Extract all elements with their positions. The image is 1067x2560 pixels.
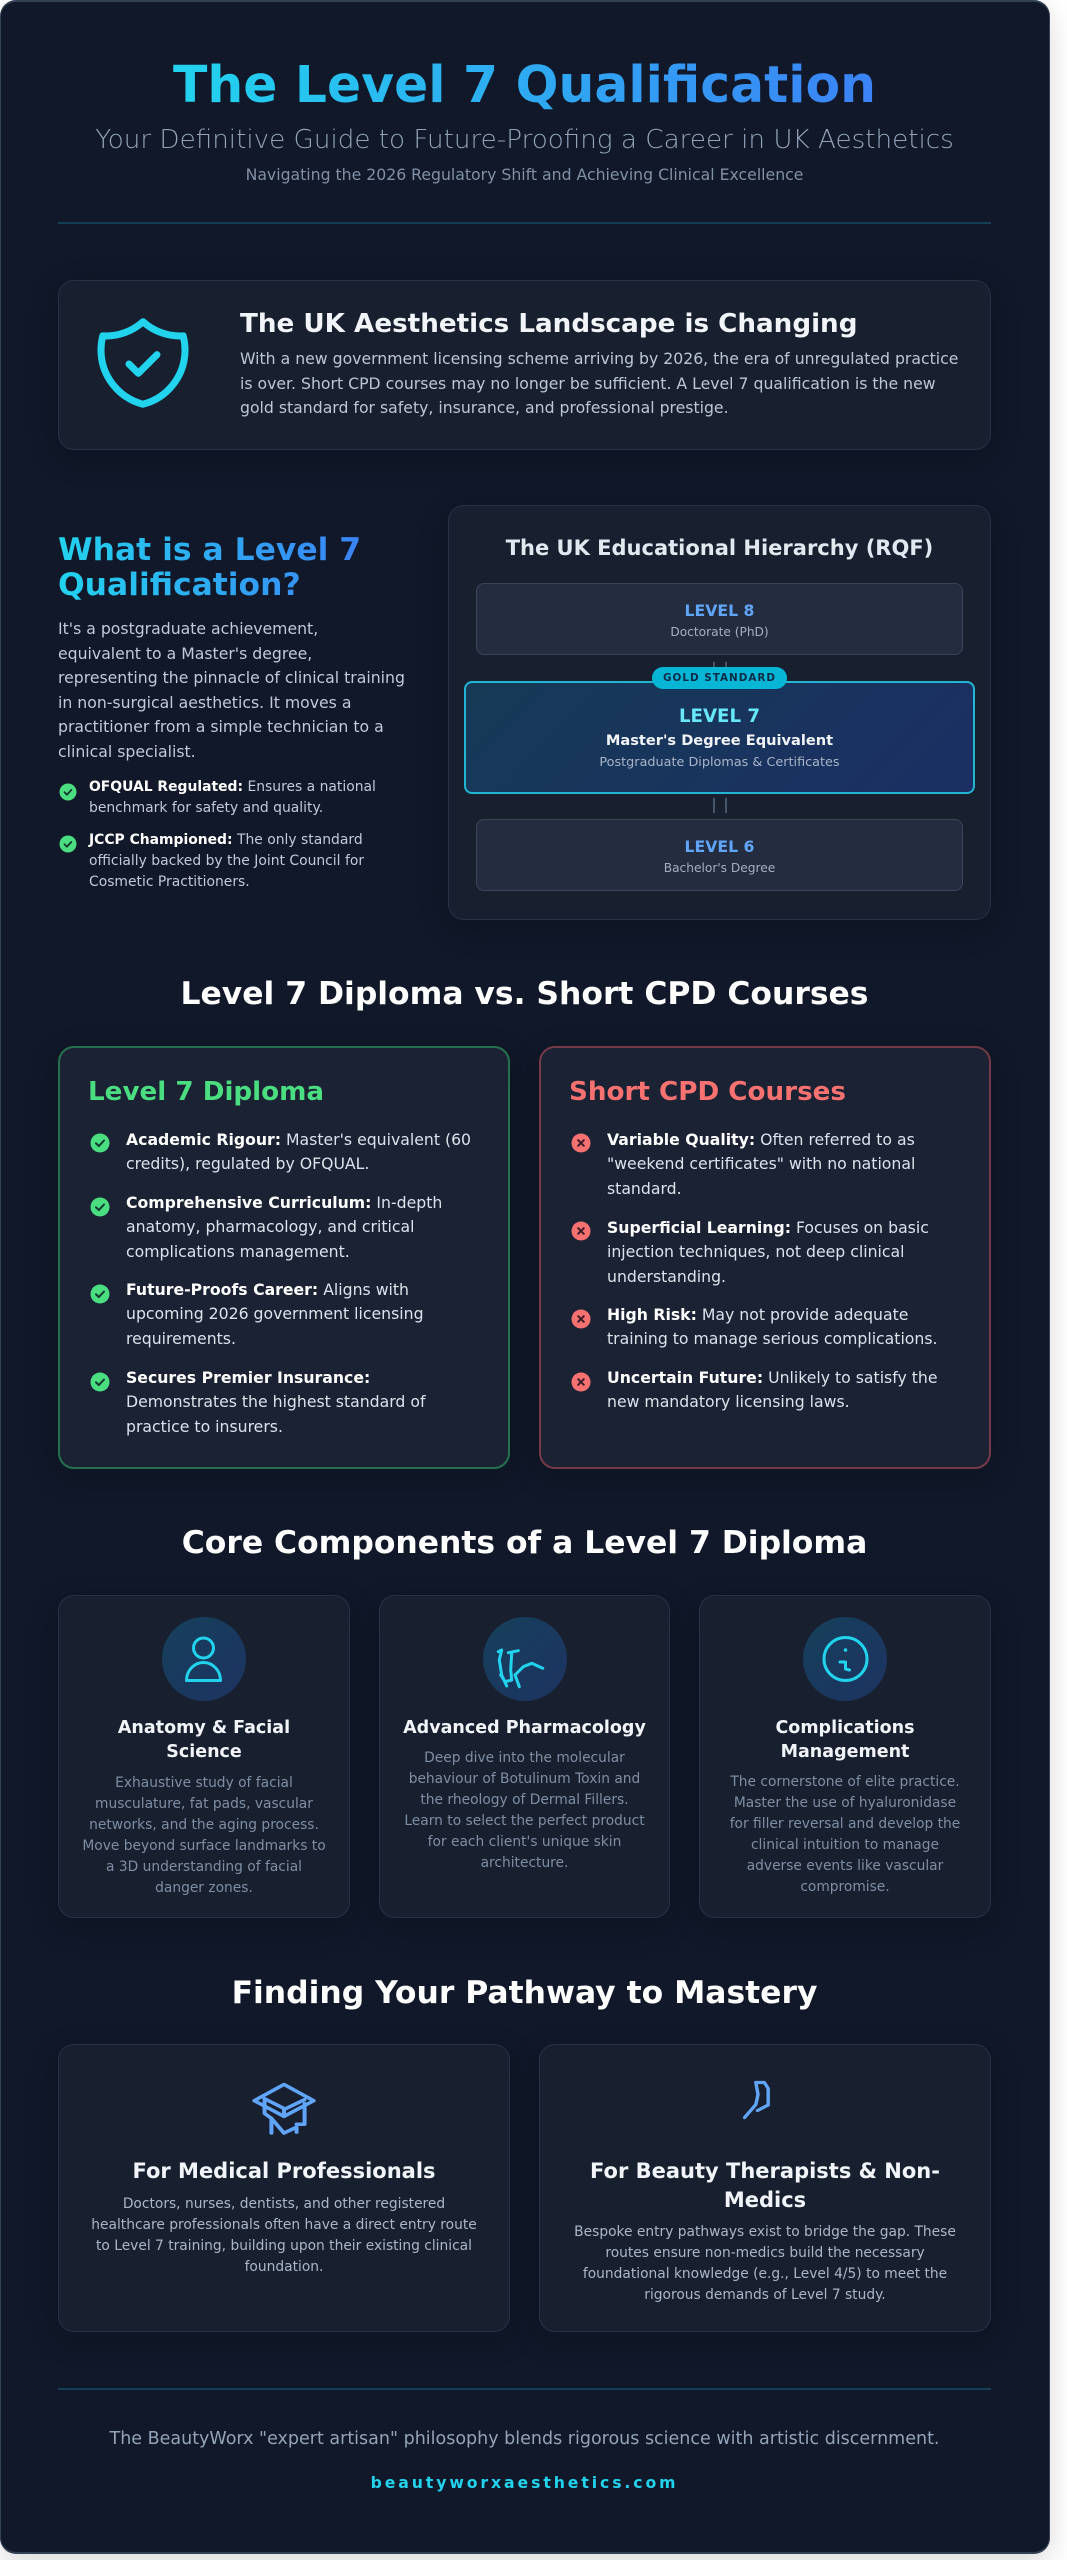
medical text: foundation. [245,2259,323,2275]
icon: check ofqual [60,784,76,800]
heading: what is a level 7 [58,532,361,603]
gold standard badge [652,667,787,689]
beauty heading: For Beauty Therapists & Non- [590,2159,940,2183]
heading: comparison: Level 7 Diploma vs. Short CPD Courses [180,976,868,1012]
icon: info [803,1617,887,1701]
landscape text [240,349,958,417]
complications heading [699,1716,991,1765]
anatomy text: a 3D understanding of facial [106,1859,302,1875]
diploma point 4: Demonstrates the highest standard of [126,1392,426,1411]
complications heading: Complications [775,1718,915,1738]
panel: anatomy [58,1595,350,1918]
anatomy text: networks, and the aging process. [89,1817,319,1833]
complications text: Master the use of hyaluronidase [734,1795,956,1811]
pharmacology text [379,1748,670,1874]
panel: medical professionals [58,2044,510,2332]
definition text: practitioner from a simple technician to a [58,717,384,736]
icon: check 4 [90,1372,110,1392]
cpd point 3: High Risk: May not provide adequate [607,1305,908,1324]
complications text: compromise. [800,1879,890,1895]
icon: cross 3 [572,1310,590,1328]
bullet: jccp [88,832,364,890]
icon: check 2 [90,1198,110,1216]
complications text: clinical intuition to manage [751,1837,939,1853]
diploma point 3 [126,1280,424,1348]
icon: check jccp [60,836,76,852]
cpd point 1: standard. [607,1179,682,1198]
diploma point 1 [126,1130,471,1173]
pharmacology text: for each client's unique skin [428,1834,621,1850]
definition text: It's a postgraduate achievement, [58,619,318,638]
diploma point 1: Academic Rigour: Master's equivalent (60 [126,1130,471,1149]
icon: cross 2 [572,1222,590,1240]
cpd point 3 [607,1305,938,1348]
panel: landscape intro [58,280,991,450]
definition text: representing the pinnacle of clinical training [58,668,405,687]
level 6 box: Bachelor's Degree [664,861,775,875]
landscape text: gold standard for safety, insurance, and professional prestige. [240,398,729,417]
cpd point 2: understanding. [607,1267,726,1286]
beauty text: foundational knowledge (e.g., Level 4/5) to meet the [583,2266,947,2282]
landscape text: With a new government licensing scheme arriving by 2026, the era of unregulated practice [240,349,958,368]
bullet: ofqual [89,779,376,816]
definition text: equivalent to a Master's degree, [58,644,312,662]
complications heading: Management [781,1742,909,1762]
landscape heading: The UK Aesthetics Landscape is Changing [240,309,857,339]
landscape text: is over. Short CPD courses may no longer be sufficient. A Level 7 qualification is the new [240,374,936,392]
icon: cross 1 [572,1134,590,1152]
heading: what is a level 7: What is a Level 7 [58,532,361,568]
icon: check 3 [90,1284,110,1304]
diploma point 2: anatomy, pharmacology, and critical [126,1217,414,1236]
anatomy text: danger zones. [155,1880,253,1896]
cpd point 4: Uncertain Future: Unlikely to satisfy the [607,1368,938,1387]
bullet: jccp: officially backed by the Joint Council for [89,853,364,869]
panel: level 7 diploma [58,1046,510,1469]
cpd point 3: training to manage serious complications. [607,1329,938,1348]
diploma point 2 [126,1193,442,1261]
icon: pharmacology [483,1617,567,1701]
icon: cross 4 [572,1372,590,1392]
pharmacology text: the rheology of Dermal Fillers. [420,1792,629,1808]
level 6 box [476,819,963,891]
level 7 box: LEVEL 7 [679,706,760,727]
anatomy heading: Science [166,1742,242,1762]
pharmacology text: behaviour of Botulinum Toxin and [409,1771,640,1787]
panel: complications [699,1595,991,1918]
diploma point 4 [126,1368,426,1436]
diploma point 2: complications management. [126,1242,350,1261]
level 8 box: LEVEL 8 [685,601,754,620]
complications text [699,1772,991,1898]
medical text: healthcare professionals often have a direct entry route [91,2217,477,2233]
anatomy text: Exhaustive study of facial [115,1775,293,1791]
pharmacology text: Learn to select the perfect product [404,1813,645,1829]
icon: check 1 [90,1134,110,1152]
complications text: for filler reversal and develop the [730,1816,960,1832]
cpd point 2: injection techniques, not deep clinical [607,1242,904,1261]
level 7 box: Postgraduate Diplomas & Certificates [599,755,840,770]
anatomy heading [118,1718,290,1762]
level 8 box [476,583,963,655]
panel: short cpd courses [539,1046,991,1469]
anatomy text [82,1775,326,1896]
diploma point 3: Future-Proofs Career: Aligns with [126,1280,409,1299]
anatomy text: Move beyond surface landmarks to [82,1838,326,1854]
beauty heading: Medics [724,2188,806,2212]
beauty text [539,2222,991,2306]
icon: shield check [98,318,188,408]
hierarchy heading: The UK Educational Hierarchy (RQF) [506,536,933,560]
gold standard badge: GOLD STANDARD [663,672,776,684]
icon: graduation cap [252,2083,316,2136]
cpd point 4: new mandatory licensing laws. [607,1392,850,1411]
cpd point 1 [607,1130,915,1198]
panel: pharmacology [379,1595,670,1918]
bullet: ofqual: benchmark for safety and quality. [89,800,323,816]
subtitle: Your Definitive Guide to Future-Proofing a Career in UK Aesthetics [95,125,954,155]
cpd point 2: Superficial Learning: Focuses on basic [607,1218,929,1237]
beauty heading [539,2157,991,2214]
medical text [58,2194,510,2278]
beauty text: Bespoke entry pathways exist to bridge the gap. These [574,2224,956,2240]
icon: pathway curve [743,2081,773,2119]
level 7 box: Master's Degree Equivalent [606,732,833,749]
level 8 box: Doctorate (PhD) [670,625,769,639]
pharmacology text: Deep dive into the molecular [424,1750,625,1766]
level 7 box [464,681,975,794]
diploma point 4: Secures Premier Insurance: [126,1368,370,1387]
diploma point 1: credits), regulated by OFQUAL. [126,1154,369,1173]
heading: core components: Core Components of a Level 7 Diploma [182,1525,867,1561]
bullet: jccp: JCCP Championed: The only standard [89,832,363,848]
diploma heading: Level 7 Diploma [88,1077,324,1107]
anatomy heading: Anatomy & Facial [118,1718,290,1738]
title: The Level 7 Qualification [173,55,876,114]
diploma point 3: requirements. [126,1329,236,1348]
definition text: in non-surgical aesthetics. It moves a [58,692,351,712]
heading: what is a level 7: Qualification? [58,567,301,603]
diploma point 2: Comprehensive Curriculum: In-depth [126,1193,442,1212]
cpd point 1: Variable Quality: Often referred to as [607,1130,915,1149]
panel: educational hierarchy [448,505,991,920]
diploma point 4: practice to insurers. [126,1417,283,1436]
definition text: clinical specialist. [58,742,196,760]
level 6 box: LEVEL 6 [685,837,754,856]
cpd heading: Short CPD Courses [569,1077,846,1107]
pharmacology text: architecture. [481,1855,568,1871]
bullet: jccp: Cosmetic Practitioners. [89,874,250,890]
definition text [58,619,405,760]
beauty text: routes ensure non-medics build the necessary [605,2245,925,2261]
footer statement: The BeautyWorx "expert artisan" philosophy blends rigorous science with artistic discernment. [110,2429,940,2449]
bullet: ofqual: OFQUAL Regulated: Ensures a national [89,779,376,795]
cpd point 2 [607,1218,929,1286]
heading: pathway: Finding Your Pathway to Mastery [232,1975,817,2011]
cpd point 4 [607,1368,938,1411]
diploma point 3: upcoming 2026 government licensing [126,1304,424,1323]
complications text: adverse events like vascular [747,1858,943,1874]
footer website: beautyworxaesthetics.com [371,2473,678,2492]
pharmacology heading: Advanced Pharmacology [403,1718,646,1738]
anatomy text: musculature, fat pads, vascular [95,1796,313,1812]
tagline: Navigating the 2026 Regulatory Shift and Achieving Clinical Excellence [246,165,803,184]
complications text: The cornerstone of elite practice. [730,1774,960,1790]
panel: beauty therapists [539,2044,991,2332]
beauty text: rigorous demands of Level 7 study. [644,2287,886,2303]
cpd point 1: "weekend certificates" with no national [607,1154,915,1173]
medical text: Doctors, nurses, dentists, and other registered [123,2196,445,2212]
icon: person [162,1617,246,1701]
medical text: to Level 7 training, building upon their existing clinical [96,2238,472,2254]
medical heading: For Medical Professionals [132,2159,436,2183]
